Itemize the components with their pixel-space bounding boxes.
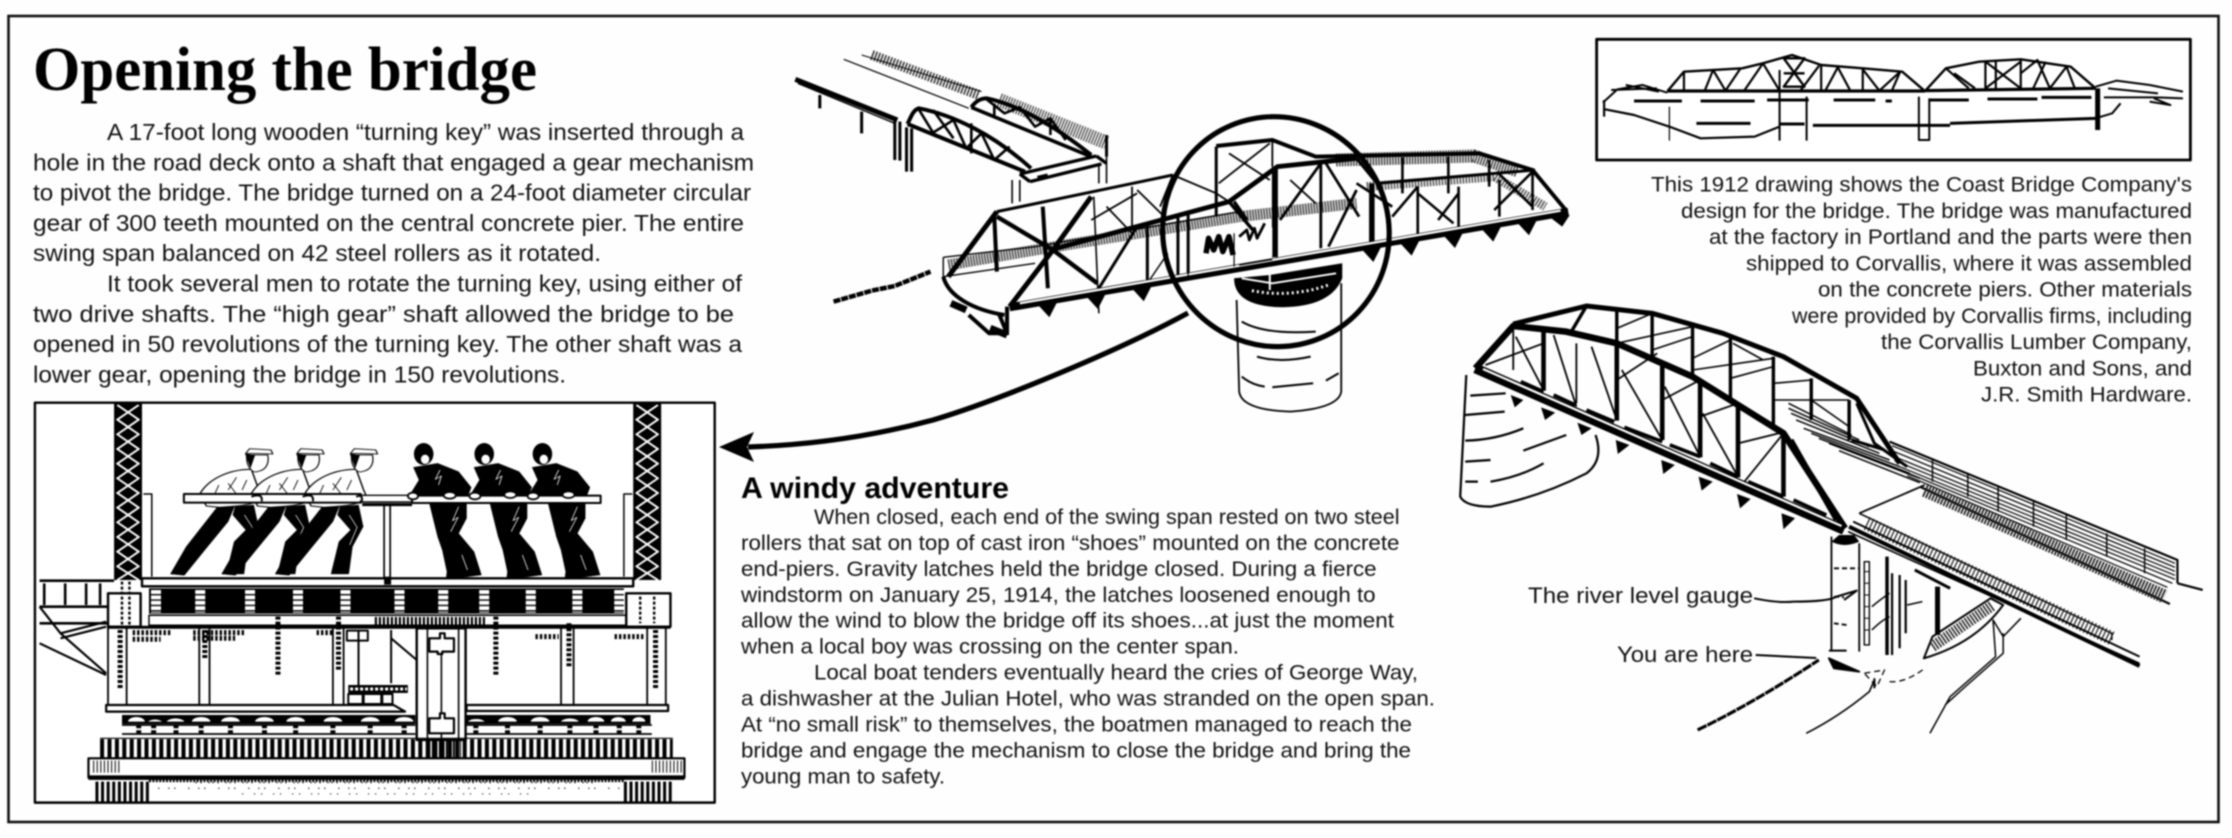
caption: 1912 drawing: This 1912 drawing shows the Coast Bridge Company's xyxy=(1651,173,2192,197)
side posts xyxy=(143,494,632,577)
caption: 1912 drawing: J.R. Smith Hardware. xyxy=(1981,383,2192,407)
wind squiggle xyxy=(834,272,931,302)
deck beam xyxy=(1010,212,1568,307)
small drive gear xyxy=(348,685,408,704)
distant approach and fixed spans xyxy=(795,55,1107,203)
central pier with stipple xyxy=(95,781,673,794)
central king post xyxy=(417,628,466,740)
caption: 1912 drawing: were provided by Corvallis firms, including xyxy=(1791,304,2192,328)
big circular gear teeth xyxy=(100,739,673,758)
turntable platform xyxy=(106,705,668,712)
text block: a windy adventure: rollers that sat on top of cast iron “shoes” mounted on the concrete xyxy=(741,531,1400,555)
truss far side xyxy=(1513,306,1920,483)
central pier with rotating gear xyxy=(1234,263,1342,412)
text block: opening the bridge xyxy=(33,119,754,387)
end pier xyxy=(1460,375,1598,507)
swing span truss xyxy=(943,140,1570,335)
curved arrow from circle to mechanism xyxy=(719,313,1188,462)
near roadway xyxy=(1848,513,2140,666)
magnifier circle xyxy=(1160,115,1392,348)
caption: 1912 drawing: Buxton and Sons, and xyxy=(1973,356,2192,380)
text block: a windy adventure: At “no small risk” to themselves, the boatmen managed to reach the xyxy=(741,712,1412,736)
panel: turning key gear mechanism illustration xyxy=(35,403,715,803)
figure: pushing worker 5 xyxy=(469,443,542,579)
text block: a windy adventure: allow the wind to blow the bridge off its shoes...at just the moment xyxy=(741,609,1394,633)
figure: pushing worker 3 xyxy=(275,449,378,575)
leader: you are here xyxy=(1756,655,1816,658)
text block: a windy adventure: when a local boy was crossing on the center span. xyxy=(740,635,1239,659)
illustration: bridge perspective with pier and gauge xyxy=(1460,306,2203,733)
right lattice tower xyxy=(633,403,661,580)
label: river level gauge: The river level gauge xyxy=(1528,583,1753,608)
text block: opening the bridge: It took several men to rotate the turning key, using either of xyxy=(107,270,742,296)
lower chord xyxy=(1475,368,1844,530)
illustration: swing bridge opened over pier xyxy=(795,55,1570,412)
concrete pier cap xyxy=(88,758,684,778)
title: Opening the bridge xyxy=(33,36,537,104)
turning key bar xyxy=(184,491,601,505)
text block: opening the bridge: to pivot the bridge. The bridge turned on a 24-foot diameter circular xyxy=(33,180,751,206)
heading: a windy adventure: A windy adventure xyxy=(741,472,1009,505)
left lattice tower xyxy=(114,403,142,580)
1912 bridge elevation sketch xyxy=(1603,55,2183,141)
tiny operator figures on deck xyxy=(1188,223,1272,277)
caption: 1912 drawing: the Corvallis Lumber Company, xyxy=(1881,330,2192,354)
text block: opening the bridge: opened in 50 revolutions of the turning key. The other shaft was a xyxy=(33,331,743,357)
figure: pushing worker 6 xyxy=(528,443,600,579)
upper pinion gear xyxy=(375,617,487,627)
text block: opening the bridge: two drive shafts. The “high gear” shaft allowed the bridge to be xyxy=(33,301,734,327)
panel: 1912 design drawing inset xyxy=(1597,39,2190,160)
text block: opening the bridge: lower gear, opening the bridge in 150 revolutions. xyxy=(33,361,566,387)
deck and black girder xyxy=(107,578,670,627)
text block: opening the bridge: swing span balanced on 42 steel rollers as it rotated. xyxy=(33,240,601,266)
figure: pushing worker 1 xyxy=(170,449,273,575)
text block: opening the bridge: A 17-foot long wooden “turning key” was inserted through a xyxy=(107,119,745,145)
caption: 1912 drawing: shipped to Corvallis, where it was assembled xyxy=(1746,252,2192,276)
turning key shaft xyxy=(384,503,391,581)
floor beam ends xyxy=(1039,215,1570,317)
caption: 1912 drawing xyxy=(1651,173,2192,407)
text block: a windy adventure: windstorm on January 25, 1914, the latches loosened enough to xyxy=(740,583,1376,607)
text block: a windy adventure: When closed, each end of the swing span rested on two steel xyxy=(814,505,1400,529)
left approach framing xyxy=(40,581,114,675)
far roadway railing xyxy=(1859,442,2203,604)
truss near side xyxy=(1475,326,1845,530)
text block: a windy adventure: Local boat tenders eventually heard the cries of George Way, xyxy=(814,661,1418,685)
pier with level gauge xyxy=(1831,535,2003,658)
text block: opening the bridge: hole in the road deck onto a shaft that engaged a gear mechanism xyxy=(33,149,754,175)
rollers xyxy=(122,715,652,734)
caption: 1912 drawing: design for the bridge. The bridge was manufactured xyxy=(1681,199,2192,223)
caption: 1912 drawing: on the concrete piers. Other materials xyxy=(1818,278,2192,302)
text block: opening the bridge: gear of 300 teeth mounted on the central concrete pier. The entire xyxy=(33,210,744,236)
figure: pushing worker 4 xyxy=(409,443,481,579)
text block: a windy adventure: young man to safety. xyxy=(741,764,945,788)
text block: a windy adventure: end-piers. Gravity latches held the bridge closed. During a fierce xyxy=(741,557,1377,581)
riverbank ground lines xyxy=(1698,618,2021,733)
text block: a windy adventure: bridge and engage the mechanism to close the bridge and bring the xyxy=(741,738,1411,762)
frame columns xyxy=(108,617,666,705)
figure: pushing worker 2 xyxy=(222,449,324,575)
leader: river level gauge xyxy=(1754,591,1857,602)
floor beam ends xyxy=(1511,395,1795,529)
text block: a windy adventure: a dishwasher at the Julian Hotel, who was stranded on the open span. xyxy=(741,686,1435,710)
deck end curve and corner xyxy=(943,277,1007,335)
text block: a windy adventure xyxy=(740,505,1435,788)
caption: 1912 drawing: at the factory in Portland and the parts were then xyxy=(1709,225,2192,249)
label: you are here: You are here xyxy=(1617,642,1753,667)
